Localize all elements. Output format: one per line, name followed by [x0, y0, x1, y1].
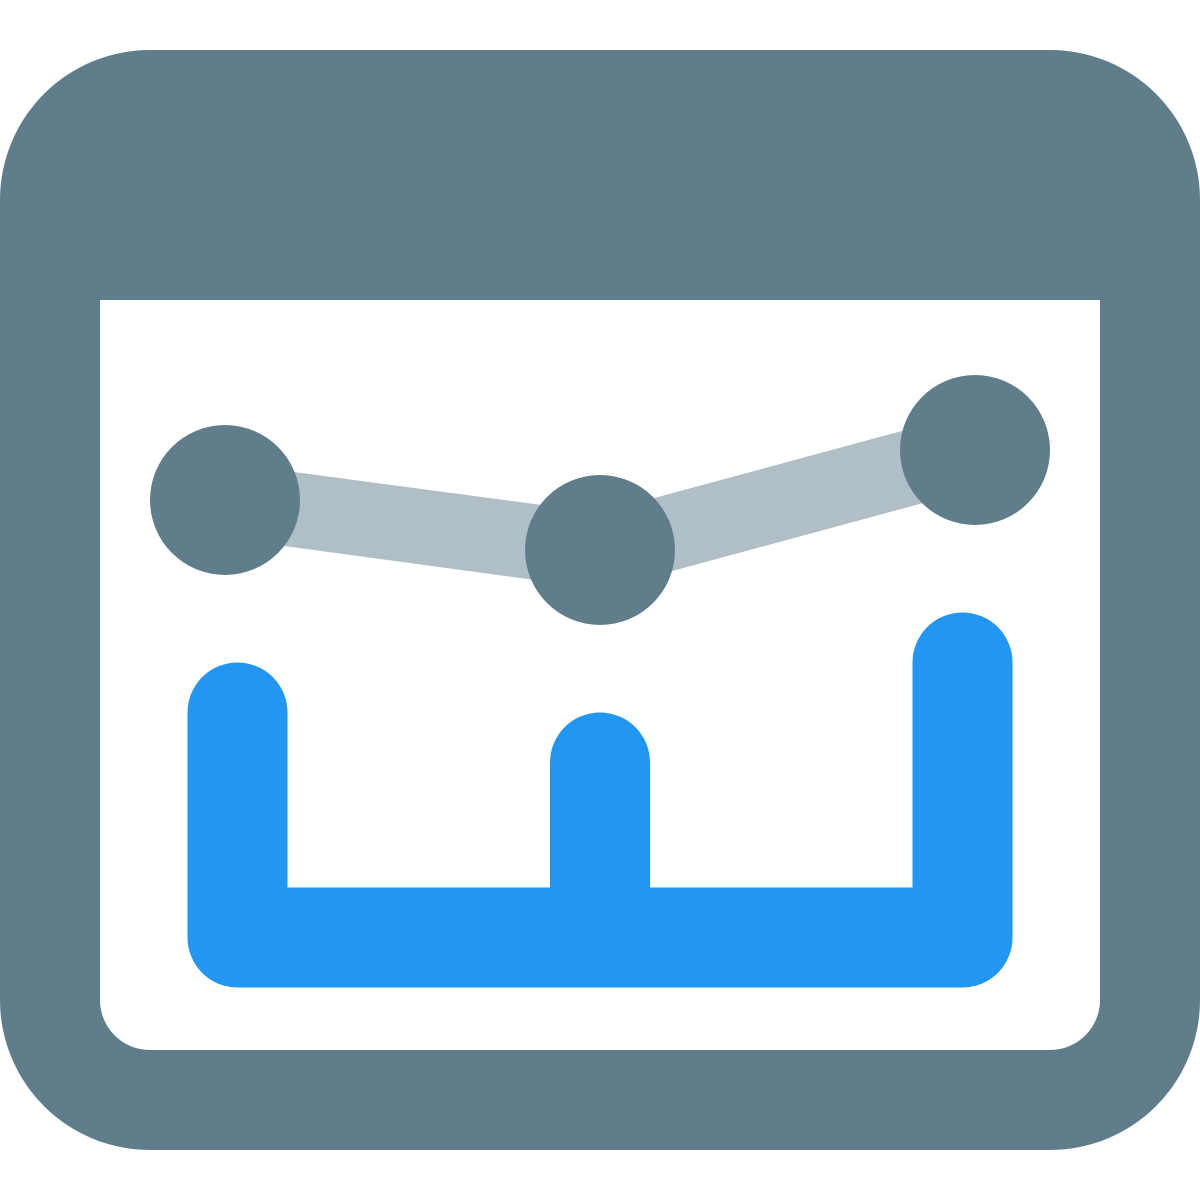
data point: right	[900, 375, 1050, 525]
data point: middle	[525, 475, 675, 625]
bar chart	[188, 612, 1012, 988]
line chart connectors	[220, 414, 985, 590]
data point: left	[150, 425, 300, 575]
line chart	[150, 375, 1050, 625]
